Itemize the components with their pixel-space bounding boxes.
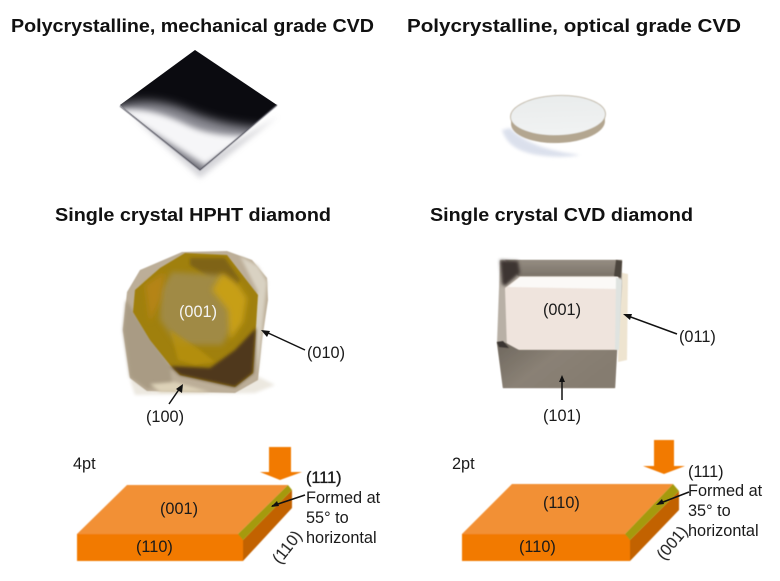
bevel face (111) [238, 485, 292, 540]
arrow: 2pt pointer [656, 492, 689, 505]
photo: CVD single crystal [497, 260, 628, 388]
arrow: 4pt pointer [271, 495, 305, 507]
title: polycrystalline mechanical grade: Polycrystalline, mechanical grade CVD [11, 15, 374, 36]
label: 2pt: 2pt [452, 455, 475, 473]
label: 2pt front (110): (110) [519, 538, 556, 556]
label: 2pt formed at 35°: horizontal [688, 522, 759, 540]
label: (101): (101) [543, 407, 581, 425]
arrow: HPHT (010) [261, 330, 305, 350]
bevel face (111) [625, 484, 679, 540]
slab side face (001) [630, 491, 679, 561]
arrow: 4pt load [260, 447, 302, 480]
label: 4pt formed at 55°: horizontal [306, 529, 377, 547]
label: 4pt front (110): (110) [136, 538, 173, 556]
title: polycrystalline optical grade: Polycrystalline, optical grade CVD [407, 15, 741, 36]
label: 4pt (001): (001) [160, 500, 198, 518]
label: (010): (010) [307, 344, 345, 362]
slab front face (110) [462, 534, 630, 561]
label: 4pt side (110): (110) [269, 527, 306, 567]
arrow: CVD (011) [623, 314, 677, 334]
photo: optical grade CVD disc [502, 94, 606, 157]
arrow: HPHT (100) [169, 384, 183, 404]
arrow: CVD (101) [559, 375, 565, 400]
diagram: 4pt slab [77, 485, 292, 561]
label: 4pt (111): (111) [306, 469, 342, 487]
title: single crystal CVD: Single crystal CVD diamond [430, 204, 693, 225]
slab top face (110) [462, 484, 673, 534]
label: CVD (001): (001) [543, 301, 581, 319]
label: 2pt formed at 35°: Formed at [688, 482, 762, 500]
label: 2pt formed at 35°: 35° to [688, 502, 731, 520]
diagram: 2pt slab [462, 484, 679, 561]
slab front face (110) [77, 534, 243, 561]
label: 2pt side (001): (001) [653, 523, 692, 564]
title: single crystal HPHT: Single crystal HPHT diamond [55, 204, 331, 225]
label: (011): (011) [679, 328, 716, 346]
label: (100): (100) [146, 408, 184, 426]
arrow: 2pt load [643, 440, 685, 474]
label: 2pt (111): (111) [688, 463, 724, 481]
label: 4pt formed at 55°: Formed at [306, 489, 380, 507]
label: 2pt top (110): (110) [543, 494, 580, 512]
photo: HPHT diamond [123, 251, 275, 395]
label: HPHT (001): (001) [179, 303, 217, 321]
slab top face (001) [77, 485, 288, 534]
label: 4pt formed at 55°: 55° to [306, 509, 349, 527]
photo: mechanical grade CVD plate [110, 50, 278, 180]
label: 4pt: 4pt [73, 455, 96, 473]
slab side face (110) [243, 490, 292, 561]
